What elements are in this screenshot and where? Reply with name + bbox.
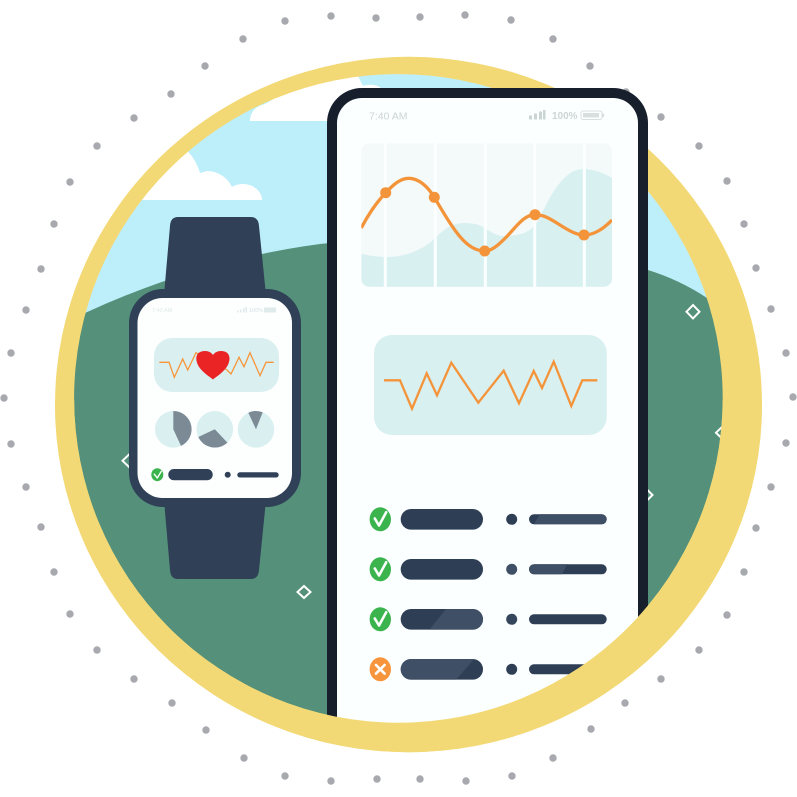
watch status bar (152, 307, 276, 314)
landscape background (74, 74, 723, 714)
list row 1 (370, 507, 610, 531)
phone status bar: 100% (552, 111, 578, 122)
pulse panel (374, 335, 607, 435)
pie chart 3 (238, 411, 274, 448)
grid lines (384, 169, 586, 287)
smartwatch (129, 217, 301, 579)
phone body (327, 88, 648, 760)
sparkle diamonds (122, 305, 729, 598)
watch heart-rate panel (154, 338, 279, 392)
watch status bar: 7:40 AM (152, 308, 173, 314)
watch strap: bottom (164, 500, 266, 579)
icon: heart (196, 351, 230, 380)
watch strap: top (164, 217, 266, 295)
pie chart 2 (196, 411, 233, 448)
yellow ring: lower overlap (55, 400, 762, 752)
watch screen (138, 298, 292, 498)
phone status bar: 7:40 AM (369, 110, 408, 122)
watch status bar: 100% (249, 308, 263, 314)
phone screen (337, 98, 638, 760)
area series (361, 169, 612, 290)
cloud: top (250, 76, 381, 121)
yellow ring (55, 57, 762, 752)
watch case (129, 289, 301, 507)
smartphone (327, 88, 648, 760)
list row 2 (370, 557, 607, 581)
area and line chart panel (361, 169, 612, 287)
list row 4 (370, 657, 607, 681)
list row 3 (370, 607, 607, 631)
hill (74, 243, 723, 714)
phone status bar (370, 110, 604, 120)
cloud: left (142, 152, 262, 200)
orange trend line (361, 178, 612, 251)
pie chart 1 (155, 411, 192, 448)
watch status row (151, 468, 279, 481)
data points (380, 187, 590, 256)
watch heart-rate line (159, 353, 274, 377)
